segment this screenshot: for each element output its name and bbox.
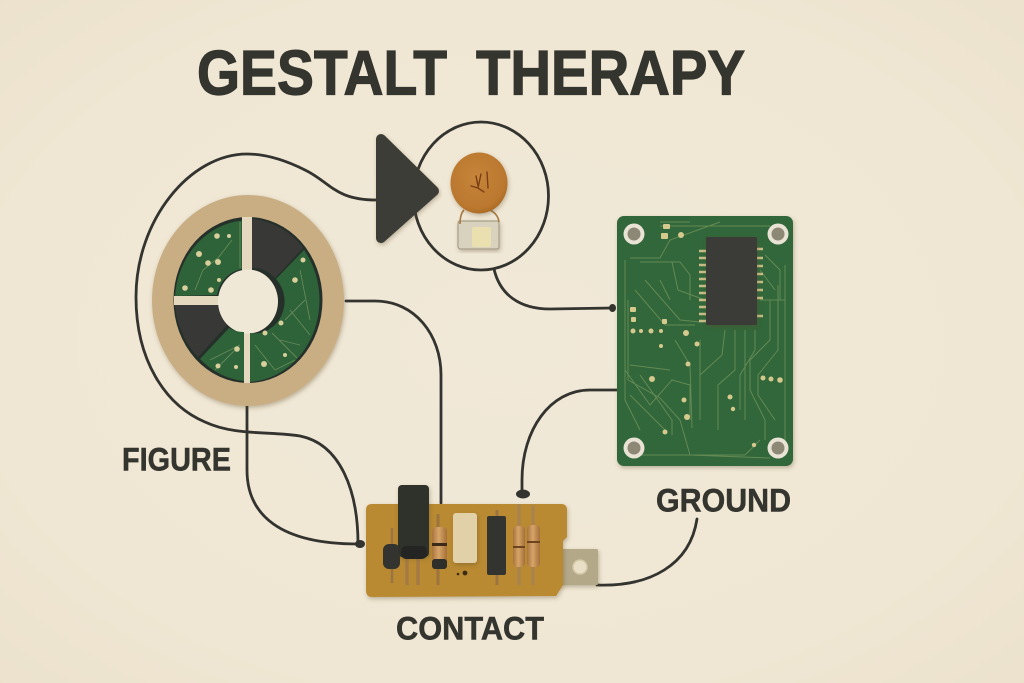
segment pads [182,233,306,369]
ring centre hole [218,270,278,334]
label: ground: GROUND [656,482,791,518]
icon: capacitor component [450,152,508,249]
wire: tab to ground label [597,519,697,585]
capacitor disc [450,152,508,214]
title: GESTALT [197,38,447,108]
resistor two [513,504,525,585]
board base [366,504,567,597]
ring base [152,195,344,406]
segment: bottom circuit [200,328,244,381]
chip body [706,237,757,325]
resistor one [432,514,447,585]
wire: triangle loop to contact board [136,154,376,544]
wire joint blobs [355,304,616,548]
wire: ring bottom to contact board [247,405,358,544]
wire: circle to board [494,269,612,309]
capacitor bracket [458,221,499,249]
board base [617,216,793,466]
segment: top right dark [252,219,303,278]
wire: circle outline [414,122,548,270]
label: contact: CONTACT [396,610,544,646]
tab hole [573,560,587,574]
segment traces [195,222,310,370]
icon: triangle [381,139,434,238]
wire: ring right to contact board [346,301,441,503]
title [197,38,745,108]
segment: top left circuit [175,220,242,296]
ring inner recess [174,217,322,383]
mounting holes [624,224,788,458]
capacitor can [398,485,429,585]
contact board [366,485,598,597]
segment: left dark [175,305,227,357]
metal tab [560,549,598,585]
resistor three [527,505,540,585]
board pads [630,224,783,447]
ring slits [174,217,252,383]
segment: right circuit [250,250,319,382]
ring diagram [152,195,344,406]
label: figure: FIGURE [122,442,231,478]
board traces [625,222,785,458]
capacitor square [472,227,491,247]
wires [136,122,697,585]
wire: board to contact board [522,390,617,495]
board dots [457,571,467,575]
black resistor [487,510,506,585]
transistor [383,528,400,583]
cream block [453,513,477,563]
chip pins [699,249,763,321]
circuit board [617,216,793,466]
title: THERAPY [476,38,745,108]
capacitor leads [460,210,499,224]
